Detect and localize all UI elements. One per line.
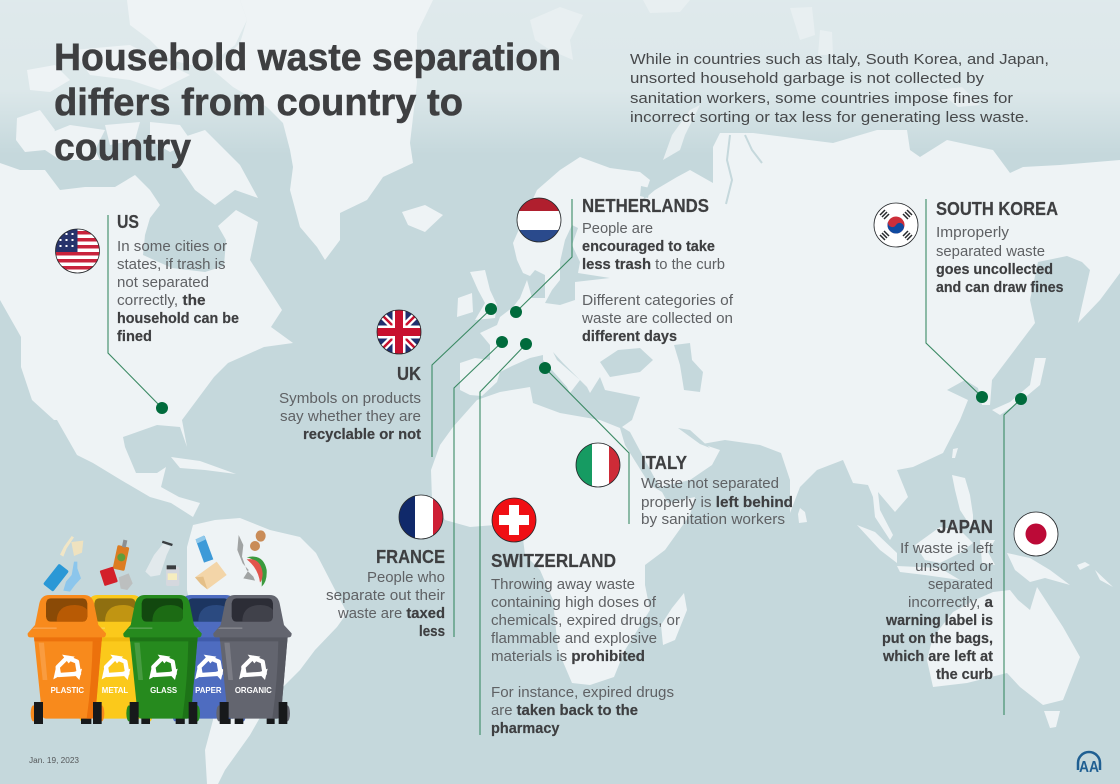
Japan text: separated bbox=[928, 576, 993, 593]
title: differs from country to bbox=[54, 82, 463, 124]
illustration: recycling bins and waste items bbox=[28, 530, 292, 724]
bin: paper: PAPER bbox=[195, 686, 222, 695]
US text: US bbox=[117, 211, 139, 232]
intro text: unsorted household garbage is not collected by bbox=[630, 70, 985, 87]
land: Sumatra Java Borneo Sulawesi Philippines Taiwan New Guinea bbox=[857, 448, 1113, 587]
France text: waste are taxed bbox=[337, 605, 445, 622]
Italy text: Waste not separated bbox=[641, 475, 779, 492]
Switzerland text bbox=[491, 550, 680, 737]
Netherlands text: less trash to the curb bbox=[582, 256, 725, 273]
Japan text: warning label is bbox=[885, 612, 993, 629]
US text bbox=[117, 211, 239, 345]
leader line and dot: Japan bbox=[1004, 393, 1027, 715]
land: Arctic islands of Eurasia bbox=[530, 0, 980, 160]
bin: glass bbox=[123, 595, 202, 724]
Switzerland text: Throwing away waste bbox=[491, 576, 635, 593]
land: North America bbox=[0, 163, 293, 517]
leader line and dot: US bbox=[108, 215, 168, 414]
waste items: plastic bbox=[43, 536, 83, 592]
waste items: paper bbox=[195, 535, 227, 589]
title: country bbox=[54, 127, 191, 169]
US text: not separated bbox=[117, 274, 209, 291]
US text: household can be bbox=[117, 310, 239, 327]
Switzerland text: flammable and explosive bbox=[491, 630, 657, 647]
UK text: say whether they are bbox=[280, 408, 421, 425]
Japan text bbox=[882, 516, 994, 683]
bin: paper bbox=[169, 595, 248, 724]
US text: states, if trash is bbox=[117, 256, 226, 273]
South Korea text: and can draw fines bbox=[936, 279, 1064, 296]
Japan text: If waste is left bbox=[900, 540, 994, 557]
land: British Isles bbox=[457, 270, 497, 320]
land: Baffin and Arctic islands bbox=[16, 0, 258, 474]
bin: organic: ORGANIC bbox=[235, 686, 272, 695]
Switzerland text: containing high doses of bbox=[491, 594, 657, 611]
leader line and dot: Netherlands bbox=[510, 199, 572, 318]
Netherlands text: waste are collected on bbox=[581, 310, 733, 327]
Japan text: which are left at bbox=[882, 648, 993, 665]
France text: less bbox=[419, 623, 445, 640]
icon: Italy flag bbox=[576, 443, 620, 487]
leader line and dot: France bbox=[454, 336, 508, 637]
US text: correctly, the bbox=[117, 292, 206, 309]
South Korea text bbox=[936, 198, 1064, 296]
Netherlands text bbox=[581, 195, 734, 345]
Japan text: unsorted or bbox=[915, 558, 993, 575]
US text: fined bbox=[117, 328, 152, 345]
Netherlands text: encouraged to take bbox=[582, 238, 715, 255]
land: Africa bbox=[431, 387, 695, 685]
intro text: sanitation workers, some countries impose fines for bbox=[630, 90, 1013, 107]
Japan text: JAPAN bbox=[937, 516, 993, 537]
intro text bbox=[630, 51, 1049, 126]
Switzerland text: are taken back to the bbox=[491, 702, 638, 719]
land: Greenland bbox=[213, 0, 433, 260]
logo: AA: AA bbox=[1079, 759, 1099, 776]
land: Eurasia bbox=[460, 130, 1120, 540]
France text bbox=[326, 546, 445, 640]
South Korea text: Improperly bbox=[936, 224, 1010, 241]
land: Tasmania and Japan bbox=[992, 358, 1060, 728]
title bbox=[54, 37, 561, 169]
bin: organic bbox=[213, 595, 292, 724]
Switzerland text: chemicals, expired drugs, or bbox=[491, 612, 680, 629]
Italy text bbox=[641, 452, 793, 528]
Japan text: put on the bags, bbox=[882, 630, 993, 647]
bin: plastic bbox=[28, 595, 106, 724]
Netherlands text: Different categories of bbox=[582, 292, 734, 309]
icon: Netherlands flag bbox=[517, 198, 561, 242]
leader line and dot: UK bbox=[432, 303, 497, 457]
title: Household waste separation bbox=[54, 37, 561, 79]
Netherlands text: NETHERLANDS bbox=[582, 195, 709, 216]
UK text: UK bbox=[397, 363, 422, 384]
leader line and dot: Switzerland bbox=[480, 338, 532, 735]
Japan text: incorrectly, a bbox=[908, 594, 994, 611]
bin: metal: METAL bbox=[102, 686, 128, 695]
bin: plastic: PLASTIC bbox=[51, 686, 84, 695]
icon: Switzerland flag bbox=[492, 498, 536, 542]
leader line and dot: South Korea bbox=[926, 199, 988, 403]
bin: metal bbox=[76, 595, 154, 724]
land: Australia bbox=[927, 587, 1080, 705]
date: Jan. 19, 2023 bbox=[29, 756, 80, 765]
Switzerland text: SWITZERLAND bbox=[491, 550, 616, 571]
land: Madagascar and Sri Lanka bbox=[661, 508, 807, 645]
Switzerland text: materials is prohibited bbox=[491, 648, 645, 665]
France text: separate out their bbox=[326, 587, 445, 604]
UK text: recyclable or not bbox=[303, 426, 421, 443]
France text: People who bbox=[367, 569, 445, 586]
land: Iceland bbox=[402, 205, 443, 232]
US text: In some cities or bbox=[117, 238, 227, 255]
South Korea text: separated waste bbox=[936, 243, 1045, 260]
Japan text: the curb bbox=[936, 666, 993, 683]
icon: UK flag bbox=[377, 310, 421, 354]
inland seas and rivers bbox=[545, 186, 710, 448]
icon: France flag bbox=[399, 495, 443, 539]
South Korea text: SOUTH KOREA bbox=[936, 198, 1058, 219]
land: South America bbox=[187, 518, 347, 784]
waste items: glass bbox=[145, 541, 179, 586]
icon: Japan flag bbox=[1014, 512, 1058, 556]
France text: FRANCE bbox=[376, 546, 445, 567]
icon: US flag bbox=[56, 229, 100, 273]
Switzerland text: For instance, expired drugs bbox=[491, 684, 674, 701]
Netherlands text: People are bbox=[582, 220, 653, 237]
Netherlands text: different days bbox=[582, 328, 677, 345]
leader line and dot: Italy bbox=[539, 362, 629, 524]
Italy text: properly is left behind bbox=[641, 494, 793, 511]
Italy text: by sanitation workers bbox=[641, 511, 785, 528]
intro text: incorrect sorting or tax less for generating less waste. bbox=[630, 109, 1029, 126]
logo: AA bbox=[1078, 752, 1100, 776]
icon: South Korea flag bbox=[874, 203, 918, 247]
UK text bbox=[279, 363, 422, 443]
Switzerland text: pharmacy bbox=[491, 720, 560, 737]
bin: glass: GLASS bbox=[150, 686, 177, 695]
Italy text: ITALY bbox=[641, 452, 688, 473]
South Korea text: goes uncollected bbox=[936, 261, 1053, 278]
waste items: organic bbox=[237, 530, 267, 587]
UK text: Symbols on products bbox=[279, 390, 421, 407]
waste items: metal bbox=[100, 540, 133, 590]
intro text: While in countries such as Italy, South Korea, and Japan, bbox=[630, 51, 1049, 68]
